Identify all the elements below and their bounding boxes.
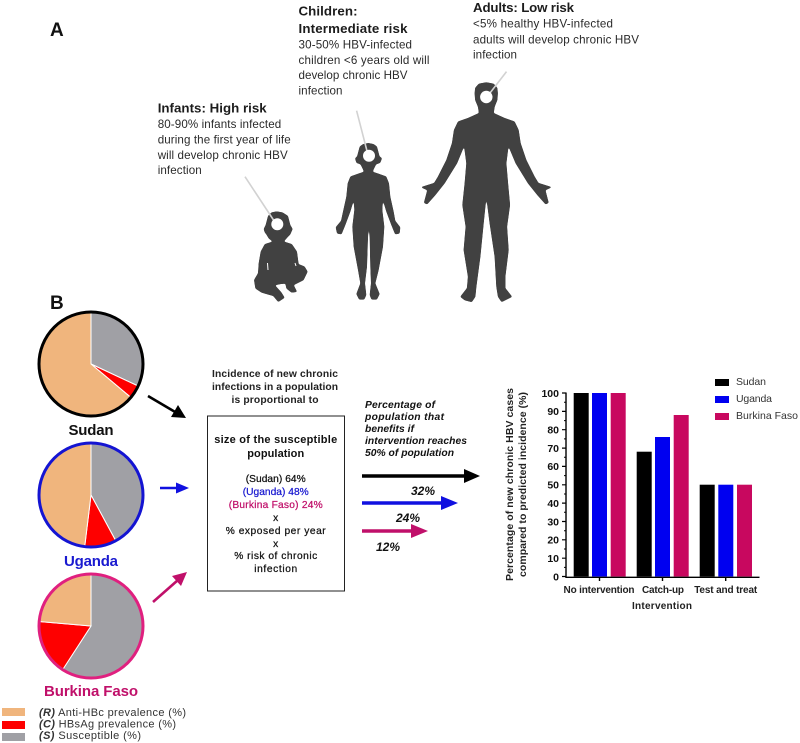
heading: incidence: Incidence of new chronic: [212, 369, 338, 380]
heading: incidence: is proportional to: [232, 395, 318, 406]
panel: susceptible population box: size of the susceptible: [214, 434, 337, 446]
text: infants: will develop chronic HBV: [157, 149, 288, 162]
text: adults: adults will develop chronic HBV: [473, 33, 639, 46]
bars: Test and treat: [700, 485, 752, 576]
arrow: Burkina Faso 12%: 12%: [376, 540, 400, 554]
arrow: Uganda 24%: [362, 496, 458, 525]
icon: adult silhouette: [422, 72, 551, 302]
chart legend: Burkina Faso: [736, 410, 798, 422]
pie legend: (C) HBsAg prevalence (%): [39, 718, 176, 730]
y tick labels: 80: [547, 424, 559, 436]
y tick labels: 0: [553, 571, 559, 583]
text: children: Intermediate risk: [298, 21, 408, 36]
text: children: children <6 years old will: [298, 54, 430, 67]
x labels: Test and treat: [694, 585, 758, 596]
y tick labels: 70: [547, 443, 559, 455]
text: adults: [473, 0, 639, 62]
panel: susceptible population box: x: [273, 513, 278, 524]
panel letter B: B: [50, 293, 64, 314]
text: children: 30-50% HBV-infected: [298, 38, 412, 52]
panel: susceptible population box: % exposed per year: [226, 526, 326, 537]
arrow: Uganda 24%: 24%: [395, 511, 420, 525]
heading: incidence: [212, 369, 338, 406]
y axis title: compared to predicted incidence (%): [517, 392, 529, 577]
panel: susceptible population box: infection: [254, 564, 297, 575]
text: percentage of population: intervention reaches: [365, 436, 467, 447]
y tick labels: 90: [547, 406, 559, 418]
y tick labels: 30: [547, 516, 559, 528]
bar chart: [504, 376, 798, 612]
text: infants: Infants: High risk: [158, 100, 267, 116]
text: infants: during the first year of life: [158, 134, 291, 147]
pie chart: Sudan: [39, 312, 143, 416]
panel: susceptible population box: (Sudan) 64%: [246, 474, 306, 485]
text: children: infection: [298, 84, 342, 98]
text: percentage of population: [364, 400, 467, 459]
x labels: Catch-up: [642, 585, 684, 596]
y tick labels: 60: [547, 461, 559, 473]
y axis title: [504, 388, 529, 581]
pie chart: Uganda: [39, 443, 143, 547]
panel: susceptible population box: (Burkina Faso) 24%: [229, 500, 323, 511]
chart legend: Uganda: [736, 393, 772, 405]
panel: susceptible population box: x: [273, 539, 278, 550]
y tick labels: 20: [547, 535, 559, 547]
text: infants: 80-90% infants infected: [158, 118, 281, 131]
chart legend: [715, 376, 798, 422]
pie legend: [2, 707, 186, 742]
panel: susceptible population box: population: [247, 448, 304, 460]
label: Sudan: Sudan: [68, 422, 114, 439]
y axis: [562, 392, 760, 581]
arrow: Sudan to box: [148, 396, 186, 418]
panel: susceptible population box: (Uganda) 48%: [243, 487, 309, 498]
text: children: develop chronic HBV: [298, 69, 408, 82]
panel: A risk by age: [50, 0, 639, 302]
text: percentage of population: population that: [364, 412, 445, 423]
label: Burkina Faso: Burkina Faso: [44, 683, 138, 700]
text: percentage of population: 50% of population: [365, 448, 454, 459]
y tick labels: 10: [547, 553, 559, 565]
heading: incidence: infections in a population: [212, 382, 338, 393]
panel: susceptible population box: [208, 416, 344, 591]
bars: Catch-up: [637, 415, 689, 576]
icon: infant silhouette: [245, 177, 307, 302]
label: Uganda: Uganda: [64, 553, 119, 570]
text: percentage of population: benefits if: [365, 424, 416, 435]
text: children: [298, 4, 430, 98]
arrow: Sudan 32%: 32%: [411, 484, 435, 498]
panel letter A: A: [50, 20, 64, 41]
pie legend: (S) Susceptible (%): [39, 730, 141, 742]
text: adults: <5% healthy HBV-infected: [473, 18, 613, 31]
x labels: No intervention: [564, 585, 634, 596]
text: percentage of population: Percentage of: [365, 400, 437, 411]
text: adults: infection: [473, 48, 517, 62]
pie legend: (R) Anti-HBc prevalence (%): [39, 707, 186, 719]
text: adults: Adults: Low risk: [473, 0, 575, 15]
y tick labels: 100: [541, 388, 559, 400]
y axis title: Percentage of new chronic HBV cases: [504, 388, 516, 581]
text: infants: [157, 100, 291, 177]
text: children: Children:: [298, 4, 358, 19]
x labels: Intervention: [632, 601, 692, 612]
arrow: Sudan 32%: [362, 469, 480, 498]
y tick labels: 50: [547, 480, 559, 492]
arrow: Burkina Faso 12%: [362, 524, 428, 554]
x labels: [564, 585, 758, 612]
icon: child silhouette: [336, 111, 400, 299]
panel: susceptible population box: % risk of chronic: [234, 551, 317, 562]
arrow: Burkina Faso to box: [153, 572, 187, 602]
arrow: Uganda to box: [160, 482, 189, 494]
bars: No intervention: [574, 393, 626, 576]
chart legend: Sudan: [736, 376, 766, 388]
pie chart: Burkina Faso: [39, 574, 143, 678]
y tick labels: [541, 388, 559, 583]
y tick labels: 40: [547, 498, 559, 510]
text: infants: infection: [158, 164, 202, 177]
